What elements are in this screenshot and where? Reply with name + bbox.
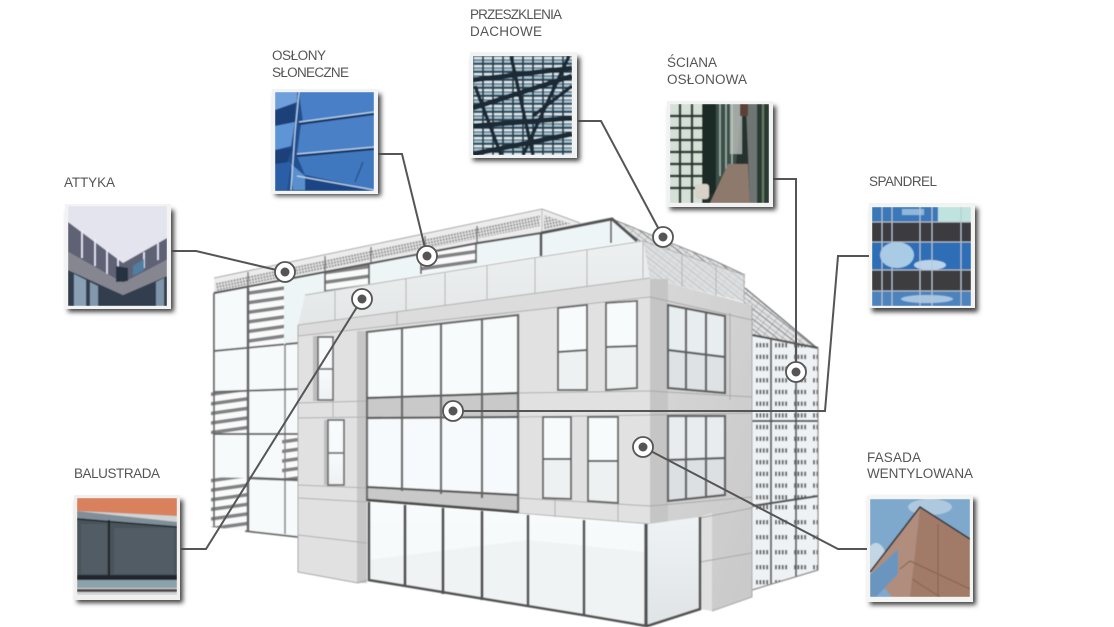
upper louvers [325,241,476,292]
sloped roof glazing [612,219,817,348]
label: fasada wentylowana [867,450,973,481]
glass balustrade [298,241,744,325]
label: ściana osłonowa: ŚCIANA [667,55,717,70]
label: przeszklenia dachowe [470,7,562,39]
photo: osłony słoneczne [272,89,381,196]
photo: fasada wentylowana [866,496,976,605]
label: balustrada: BALUSTRADA [74,466,160,481]
leader: attyka [172,251,285,272]
marker: osłony [417,246,437,266]
upper right front windows [543,301,637,503]
label: spandrel: SPANDREL [869,174,937,189]
photo: attyka [65,204,174,312]
ground floor glazing [369,502,700,626]
label: przeszklenia dachowe: PRZESZKLENIA [470,7,562,22]
marker: przeszklenia [653,227,673,247]
leader: balustrada [181,299,362,549]
building illustration [211,209,818,626]
marker: ściana osłonowa [786,362,806,382]
marker: spandrel [443,401,463,421]
label: attyka: ATTYKA [64,175,115,190]
marker: balustrada [352,289,372,309]
label: osłony słoneczne [272,48,349,80]
perforated right wall [752,335,818,590]
photo: balustrada [74,495,183,603]
label: fasada wentylowana: FASADA [867,450,921,465]
label: fasada wentylowana: WENTYLOWANA [867,466,973,481]
leader: ściana osłonowa [773,179,796,372]
front facade [298,278,650,583]
upper glazing behind attic [284,219,637,345]
photo: spandrel [869,203,978,312]
left wing facade [211,278,298,537]
label: osłony słoneczne: OSŁONY [272,48,326,63]
marker: fasada [633,437,653,457]
photo: ściana osłonowa [667,101,776,210]
leader: fasada wentylowana [643,447,867,549]
rooftop glass frame [541,219,637,256]
photo: przeszklenia dachowe [470,52,580,161]
right side facade [650,278,752,611]
upper front curtain wall [367,315,518,512]
leader: spandrel [453,256,869,411]
label: osłony słoneczne: SŁONECZNE [272,65,349,80]
marker: attyka [275,262,295,282]
label: ściana osłonowa [667,55,747,87]
leader: przeszklenia dachowe [578,121,663,237]
side windows on left column [318,337,344,485]
leader: osłony słoneczne [378,154,427,256]
label: ściana osłonowa: OSŁONOWA [667,72,747,87]
attic band [214,209,612,293]
right facade windows [668,305,725,501]
label: przeszklenia dachowe: DACHOWE [470,24,542,39]
